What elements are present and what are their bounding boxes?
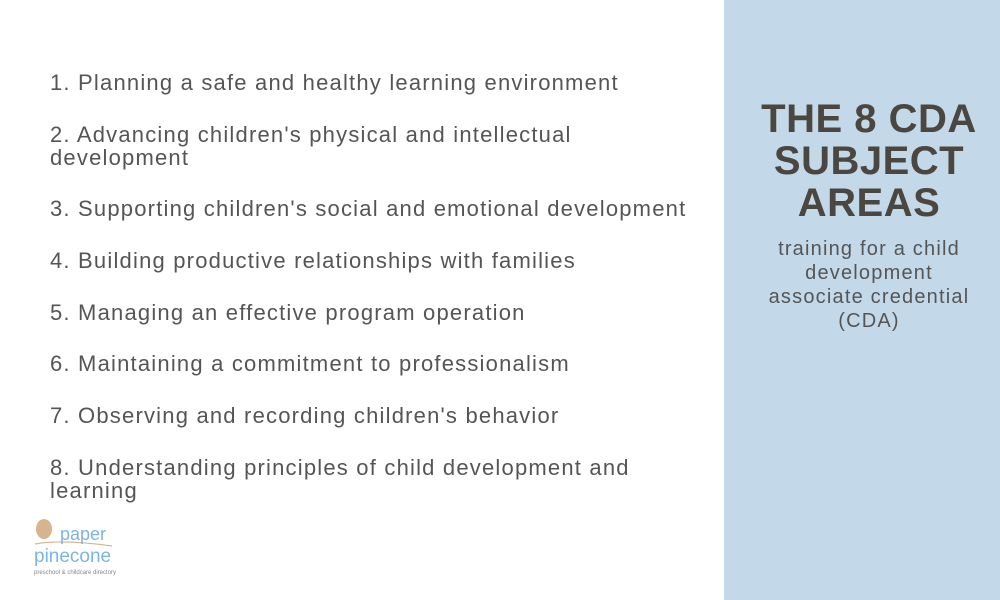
logo: paper pinecone: paper — [60, 524, 106, 544]
heading: AREAS — [798, 181, 940, 225]
item 7: 7. Observing and recording children's behavior — [50, 403, 559, 428]
item 8: 8. Understanding principles of child development and learning — [50, 455, 630, 503]
heading — [761, 97, 977, 225]
item 5: 5. Managing an effective program operation — [50, 300, 526, 325]
heading: THE 8 CDA — [761, 97, 977, 141]
logo: paper pinecone: preschool & childcare directory — [34, 570, 116, 576]
logo: paper pinecone — [34, 519, 116, 576]
heading: SUBJECT — [774, 139, 964, 183]
subtitle — [769, 238, 969, 332]
icon: pinecone — [34, 519, 112, 547]
item 2: 2. Advancing children's physical and intellectual development — [50, 122, 572, 170]
panel: title — [724, 0, 1000, 600]
item 4: 4. Building productive relationships with families — [50, 248, 576, 273]
subtitle: (CDA) — [838, 310, 900, 332]
item 3: 3. Supporting children's social and emotional development — [50, 196, 686, 221]
subtitle: associate credential — [769, 286, 969, 308]
subtitle: development — [805, 262, 933, 284]
list: subject areas — [50, 70, 686, 503]
logo: paper pinecone: pinecone — [34, 546, 111, 567]
item 1: 1. Planning a safe and healthy learning environment — [50, 70, 619, 95]
item 6: 6. Maintaining a commitment to professionalism — [50, 351, 570, 376]
subtitle: training for a child — [778, 238, 960, 260]
